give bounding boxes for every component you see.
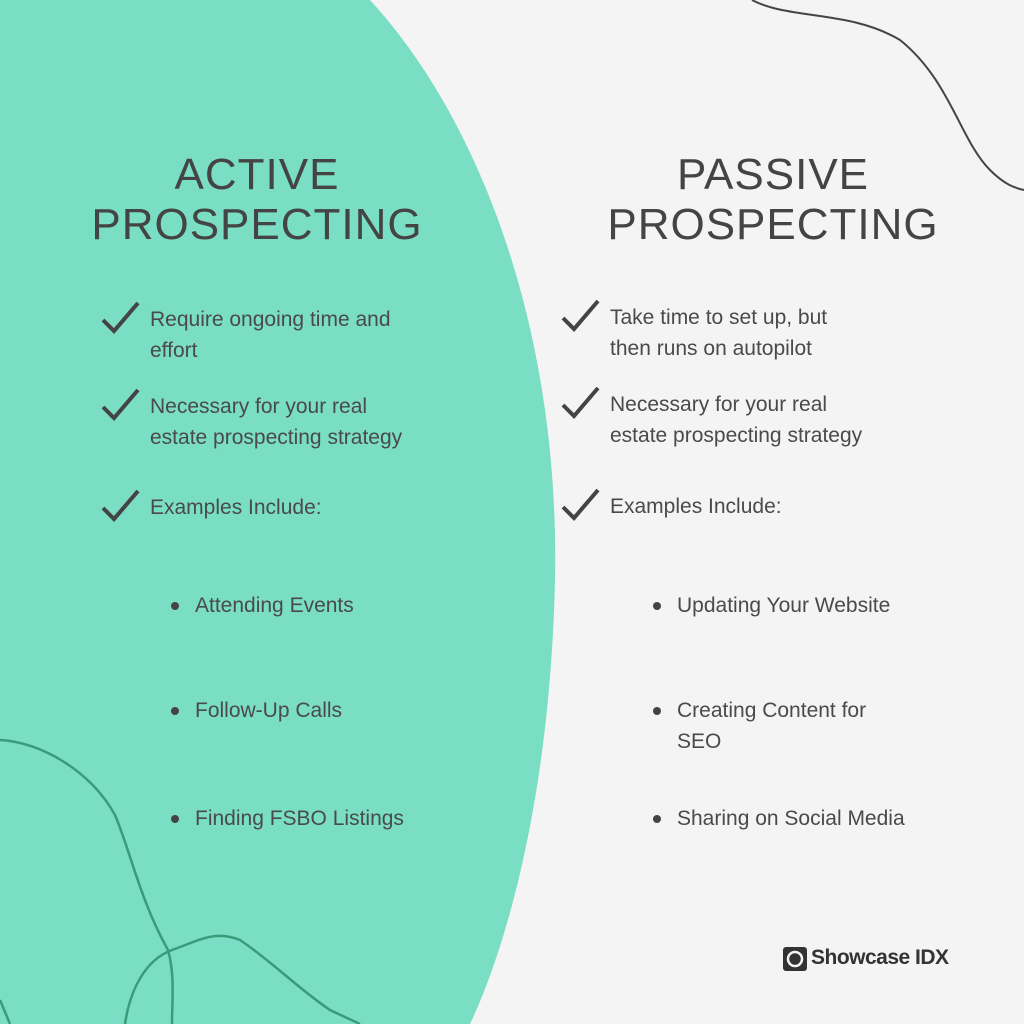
check item 1 active: effort (150, 339, 197, 362)
check item 3 active (102, 490, 322, 522)
check item 2 passive (562, 386, 862, 447)
check item 2 passive: Necessary for your real (610, 393, 827, 416)
bullets passive: Sharing on Social Media (677, 807, 905, 830)
heading: active prospecting: ACTIVE (175, 150, 339, 199)
check item 1 passive: then runs on autopilot (610, 337, 812, 360)
heading: active prospecting (91, 150, 423, 249)
bullets passive (653, 594, 905, 830)
logo: Showcase IDX: Showcase IDX (811, 946, 949, 969)
check item 3 passive: Examples Include: (610, 495, 782, 518)
bullets active (171, 594, 404, 830)
bullets active: Finding FSBO Listings (195, 807, 404, 830)
check item 2 passive: estate prospecting strategy (610, 424, 862, 447)
check item 1 active: Require ongoing time and (150, 308, 390, 331)
heading: active prospecting: PROSPECTING (91, 200, 423, 249)
heading: passive prospecting: PROSPECTING (607, 200, 939, 249)
check item 2 active: Necessary for your real (150, 395, 367, 418)
bullets active: Attending Events (195, 594, 354, 617)
check item 1 passive: Take time to set up, but (610, 306, 827, 329)
teal panel shape (0, 0, 555, 1024)
check item 1 passive (562, 300, 827, 360)
heading: passive prospecting: PASSIVE (677, 150, 869, 199)
bullets passive: SEO (677, 730, 721, 753)
heading: passive prospecting (607, 150, 939, 249)
check item 2 active (102, 388, 402, 449)
check item 3 passive (562, 488, 782, 521)
check item 3 active: Examples Include: (150, 496, 322, 519)
check item 1 active (102, 302, 390, 362)
bullets active: Follow-Up Calls (195, 699, 342, 722)
check item 2 active: estate prospecting strategy (150, 426, 402, 449)
bullets passive: Creating Content for (677, 699, 866, 722)
bullets passive: Updating Your Website (677, 594, 890, 617)
